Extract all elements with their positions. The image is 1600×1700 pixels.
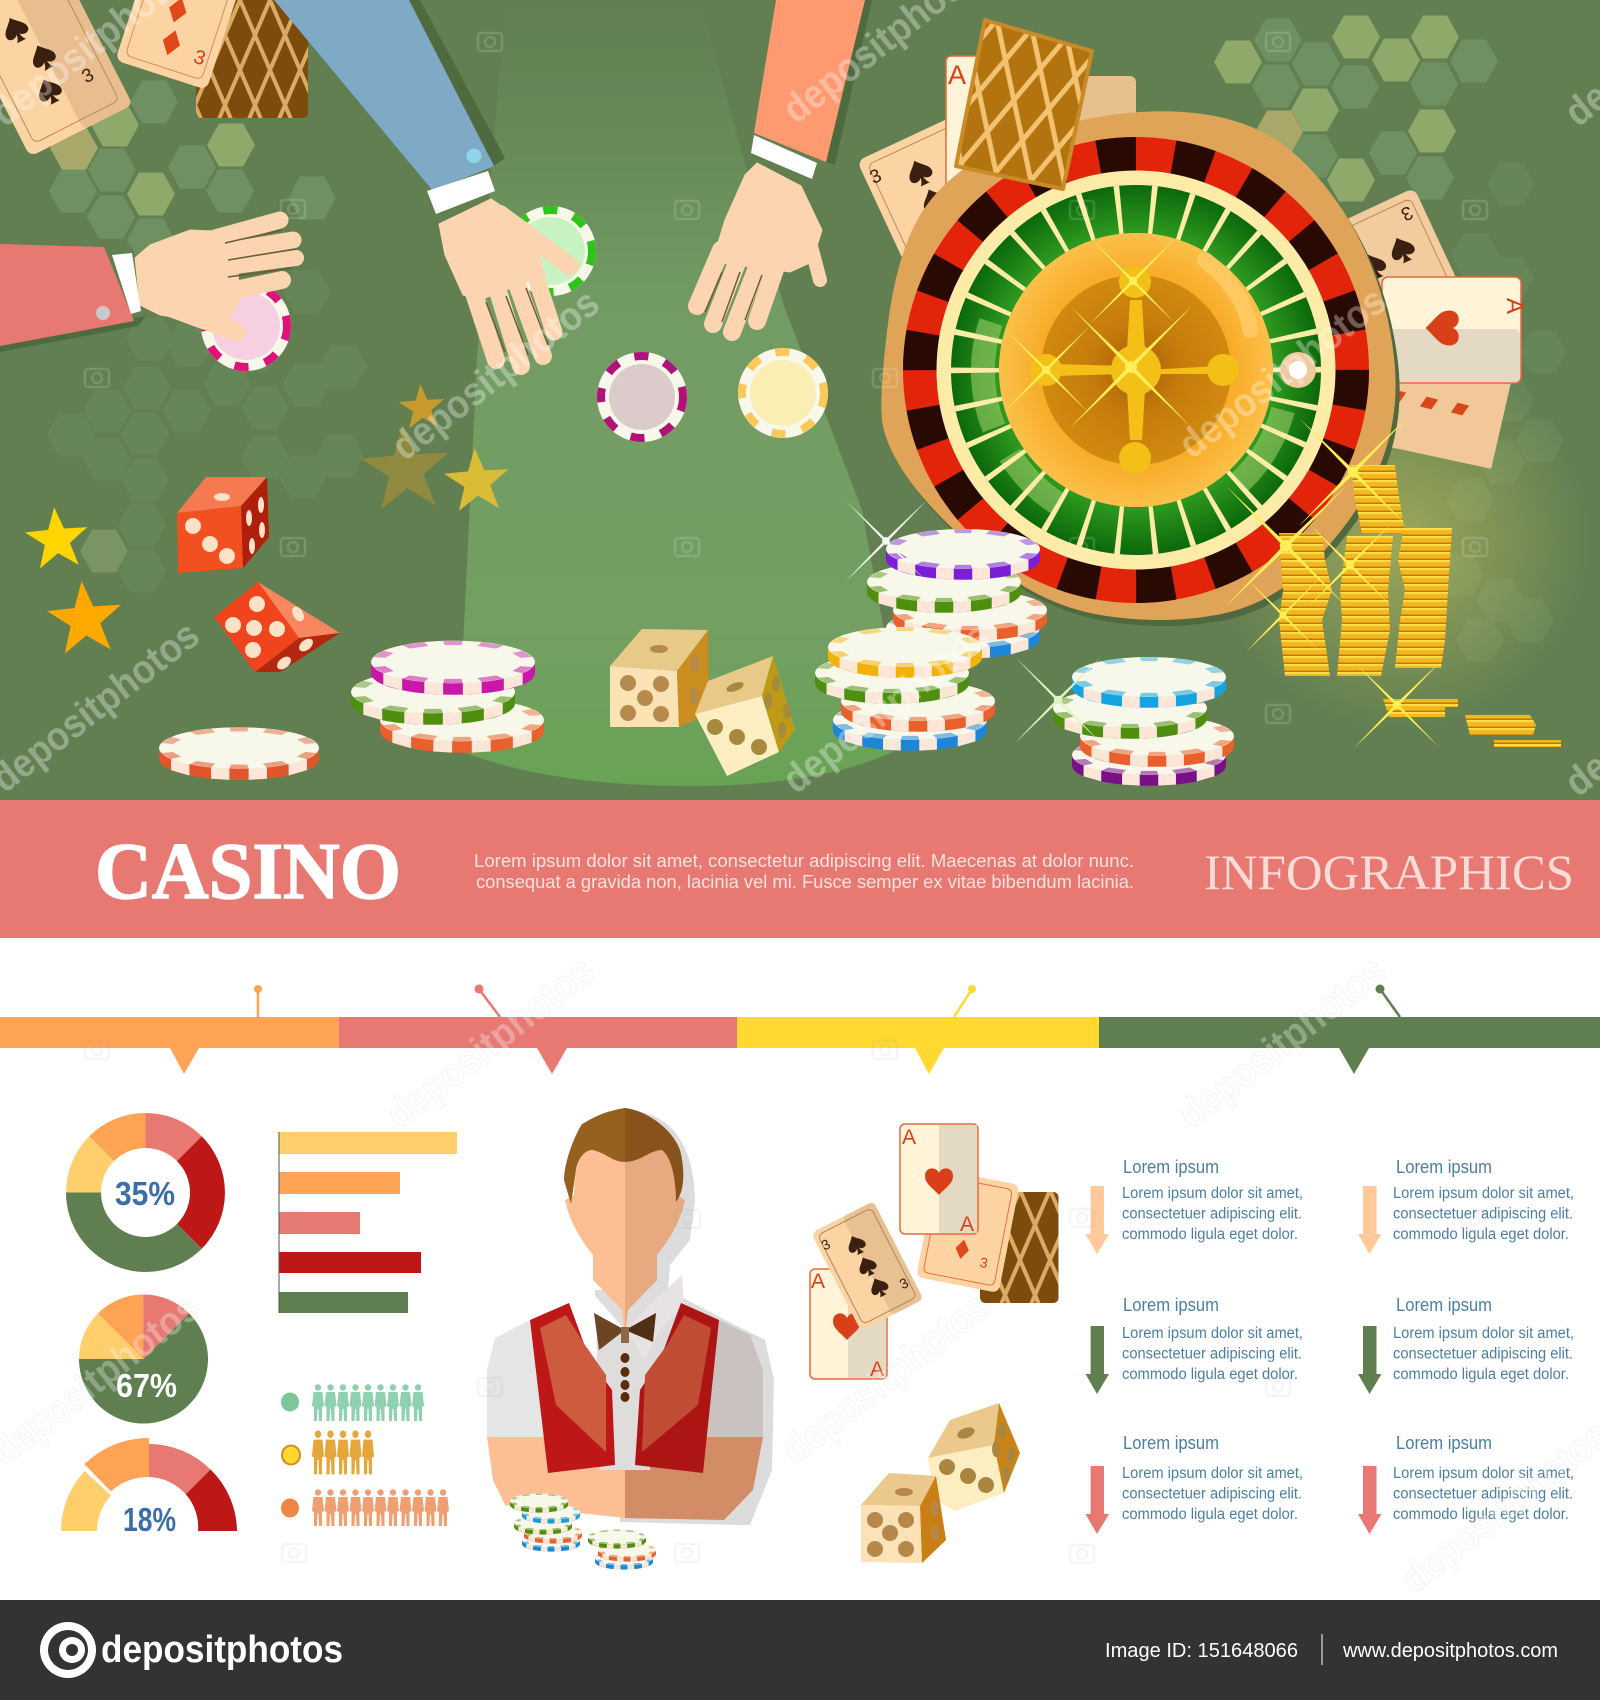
tan die front: [610, 629, 709, 727]
wheel sparkles: [1004, 239, 1191, 427]
card: diamonds: [1383, 380, 1510, 467]
card ace of hearts lower: A: [870, 1358, 884, 1381]
card ace of hearts lower: [810, 1269, 887, 1381]
text block row 2 column 2: Lorem ipsum: [1396, 1295, 1492, 1315]
arrow: [1358, 1186, 1382, 1254]
label 35%: 35%: [115, 1175, 175, 1212]
stars: [23, 382, 511, 655]
chip stack right: [1016, 657, 1234, 786]
text block row 1 column 2: [1358, 1157, 1574, 1254]
text block row 2 column 1: Lorem ipsum dolor sit amet,: [1122, 1325, 1303, 1342]
card ace of hearts upper: A: [902, 1126, 916, 1149]
red die one: [177, 477, 269, 573]
banner description: consequat a gravida non, lacinia vel mi. Fusce semper ex vitae bibendum lacinia.: [476, 871, 1134, 892]
text block row 1 column 2: commodo ligula eget dolor.: [1393, 1226, 1569, 1243]
watermark text: depositphotos: [378, 949, 603, 1137]
cards top left corner: [0, 0, 308, 157]
dealer hair: [564, 1108, 625, 1204]
watermark camera icons: [85, 33, 1487, 1563]
wheel ball: [1280, 352, 1316, 388]
pie chart 67%: [79, 1294, 208, 1424]
text block row 1 column 1: Lorem ipsum: [1123, 1157, 1219, 1177]
text block row 3 column 2: Lorem ipsum dolor sit amet,: [1393, 1465, 1574, 1482]
chip under left hand: [201, 281, 291, 371]
roulette wheel: [886, 116, 1395, 621]
tan die back: [695, 656, 795, 776]
dealer buttons: [620, 1353, 630, 1402]
dealer shirt: [595, 1290, 655, 1470]
label 67%: 67%: [116, 1367, 177, 1404]
card: three of spades left: [857, 111, 1034, 311]
red die two: [214, 582, 340, 672]
text block row 3 column 1: Lorem ipsum: [1123, 1433, 1219, 1453]
gold glow: [1210, 350, 1590, 730]
dealer sleeves: [487, 1320, 548, 1437]
lone red chip: [159, 727, 319, 780]
watermark text: depositphotos: [383, 281, 608, 469]
green chip: [506, 206, 596, 296]
card: three of spades left: 3: [867, 165, 885, 189]
card: three of spades: 3: [79, 64, 98, 88]
card: three of spades right: [1311, 188, 1484, 385]
dice lower: [861, 1403, 1020, 1563]
footer logo: [40, 1622, 343, 1678]
timeline bar green: [1099, 1017, 1600, 1074]
arrow: [1358, 1326, 1382, 1394]
text block row 2 column 1: consectetuer adipiscing elit.: [1122, 1346, 1302, 1362]
pink chip stack: [351, 641, 544, 753]
bar chart: [279, 1132, 457, 1313]
dealer chips stack one: [510, 1493, 582, 1552]
color timeline: [0, 984, 1600, 1074]
text block row 3 column 2: consectetuer adipiscing elit.: [1393, 1486, 1573, 1502]
watermark text: depositphotos: [1170, 949, 1395, 1137]
banner description: Lorem ipsum dolor sit amet, consectetur adipiscing elit. Maecenas at dolor nunc.: [474, 850, 1134, 871]
wheel wooden base: [890, 122, 1395, 621]
gold sparkles: [1226, 418, 1439, 747]
watermark text: depositphotos: [774, 1284, 999, 1472]
watermark text: depositphotos: [774, 614, 999, 802]
donut chart 35%: [66, 1113, 225, 1272]
chip stack lower center: [815, 627, 995, 751]
card: three of diamonds: [115, 0, 255, 90]
arrow: [1086, 1326, 1109, 1394]
dealer vest: [530, 1303, 615, 1473]
card: three of diamonds: 3: [191, 46, 208, 70]
text block row 2 column 1: Lorem ipsum: [1123, 1295, 1219, 1315]
text block row 1 column 1: commodo ligula eget dolor.: [1122, 1226, 1298, 1243]
center arm orange sleeve: [697, 0, 872, 332]
cards right of the wheel: A: [1501, 298, 1528, 314]
wheel red and black pockets: [886, 120, 1386, 620]
text block row 2 column 2: commodo ligula eget dolor.: [1393, 1366, 1569, 1383]
card back: [196, 0, 308, 118]
text block row 1 column 1: Lorem ipsum dolor sit amet,: [1122, 1185, 1303, 1202]
timeline bar pink: [339, 1017, 737, 1074]
cards behind the wheel: [857, 56, 1136, 311]
text block row 2 column 2: [1358, 1295, 1574, 1394]
text block row 1 column 2: consectetuer adipiscing elit.: [1393, 1206, 1573, 1222]
card: three of spades right: 3: [1397, 201, 1416, 224]
dealer chips stack two: [588, 1529, 656, 1570]
text block row 3 column 2: Lorem ipsum: [1396, 1433, 1492, 1453]
cards group lower: [810, 1124, 1058, 1381]
cards behind the wheel: A: [948, 60, 966, 90]
flat chips on table: [597, 348, 828, 442]
banner description: [474, 850, 1134, 892]
label 18%: 18%: [123, 1501, 176, 1538]
tan dice pair: [610, 629, 795, 776]
honeycomb pattern top right: [1214, 16, 1567, 662]
card three of diamonds lower: 3: [979, 1254, 990, 1271]
dealer arms: [487, 1437, 625, 1518]
footer url: www.depositphotos.com: [1342, 1640, 1558, 1662]
card ace of hearts lower: A: [811, 1270, 825, 1293]
text block row 1 column 1: consectetuer adipiscing elit.: [1122, 1206, 1302, 1222]
cards right of the wheel: [1311, 188, 1528, 467]
text block row 1 column 2: Lorem ipsum dolor sit amet,: [1393, 1185, 1574, 1202]
arrow: [1358, 1466, 1382, 1534]
people legend row orange: [281, 1489, 449, 1526]
card three of diamonds lower: [916, 1169, 1020, 1293]
right arm blue sleeve with chip: [274, 0, 596, 366]
watermark text: depositphotos: [1170, 279, 1395, 467]
footer bar: [0, 1600, 1600, 1700]
text block row 3 column 2: commodo ligula eget dolor.: [1393, 1506, 1569, 1523]
text block row 3 column 1: Lorem ipsum dolor sit amet,: [1122, 1465, 1303, 1482]
card: three of spades: [0, 0, 133, 157]
chip stack center: [847, 502, 1047, 659]
spotlight on table: [458, 0, 905, 786]
chip magenta: [597, 352, 687, 442]
banner subtitle: INFOGRAPHICS: [1204, 844, 1574, 900]
gold card back on wheel: [956, 20, 1092, 189]
wheel cream ring: [944, 178, 1328, 562]
footer logo: depositphotos: [101, 1629, 343, 1671]
timeline pins: [254, 984, 1400, 1017]
chip yellow: [738, 348, 828, 438]
card three of spades lower: 3: [819, 1236, 833, 1253]
card three of spades lower: 3: [897, 1274, 911, 1292]
dealer shadow: [620, 1112, 774, 1525]
text block row 1 column 1: [1086, 1157, 1303, 1254]
gauge chart 18%: [61, 1438, 237, 1538]
text block row 3 column 1: commodo ligula eget dolor.: [1122, 1506, 1298, 1523]
text block row 3 column 2: [1358, 1433, 1574, 1534]
timeline bar orange: [0, 1017, 339, 1074]
arrow: [1086, 1186, 1109, 1254]
arrow: [1086, 1466, 1109, 1534]
card: ace of hearts: [1382, 277, 1521, 383]
text block row 2 column 2: Lorem ipsum dolor sit amet,: [1393, 1325, 1574, 1342]
text block row 3 column 1: consectetuer adipiscing elit.: [1122, 1486, 1302, 1502]
card three of spades lower: [811, 1201, 923, 1331]
honeycomb pattern left: [47, 80, 367, 592]
text block row 3 column 1: [1086, 1433, 1303, 1534]
dealer face and neck: [565, 1150, 625, 1335]
people legend row green: [281, 1384, 424, 1421]
gold coin stacks: [1279, 465, 1561, 747]
card: ace: [946, 56, 1026, 206]
people legend row yellow: [282, 1430, 374, 1474]
left hand with sleeve and chip: [0, 220, 296, 371]
wheel cross handle: [1030, 266, 1239, 474]
footer image id: Image ID: 151648066: [1105, 1640, 1298, 1662]
lower die left: [861, 1473, 946, 1563]
panel: casino table scene: [0, 0, 1600, 800]
title: CASINO: [95, 828, 401, 916]
text block row 2 column 1: commodo ligula eget dolor.: [1122, 1366, 1298, 1383]
text block row 2 column 2: consectetuer adipiscing elit.: [1393, 1346, 1573, 1362]
text block row 1 column 2: Lorem ipsum: [1396, 1157, 1492, 1177]
lower die right: [928, 1403, 1020, 1511]
card ace of hearts upper: [900, 1124, 978, 1236]
text block row 2 column 1: [1086, 1295, 1303, 1394]
wheel green pockets: [957, 191, 1315, 549]
timeline bar yellow: [737, 1017, 1099, 1074]
dealer bow tie: [594, 1313, 656, 1350]
wheel gold disc: [999, 233, 1273, 507]
dealer figure: [487, 1108, 774, 1570]
card back lower: [980, 1192, 1058, 1303]
banner: [0, 800, 1600, 938]
card ace of hearts upper: A: [960, 1213, 974, 1236]
